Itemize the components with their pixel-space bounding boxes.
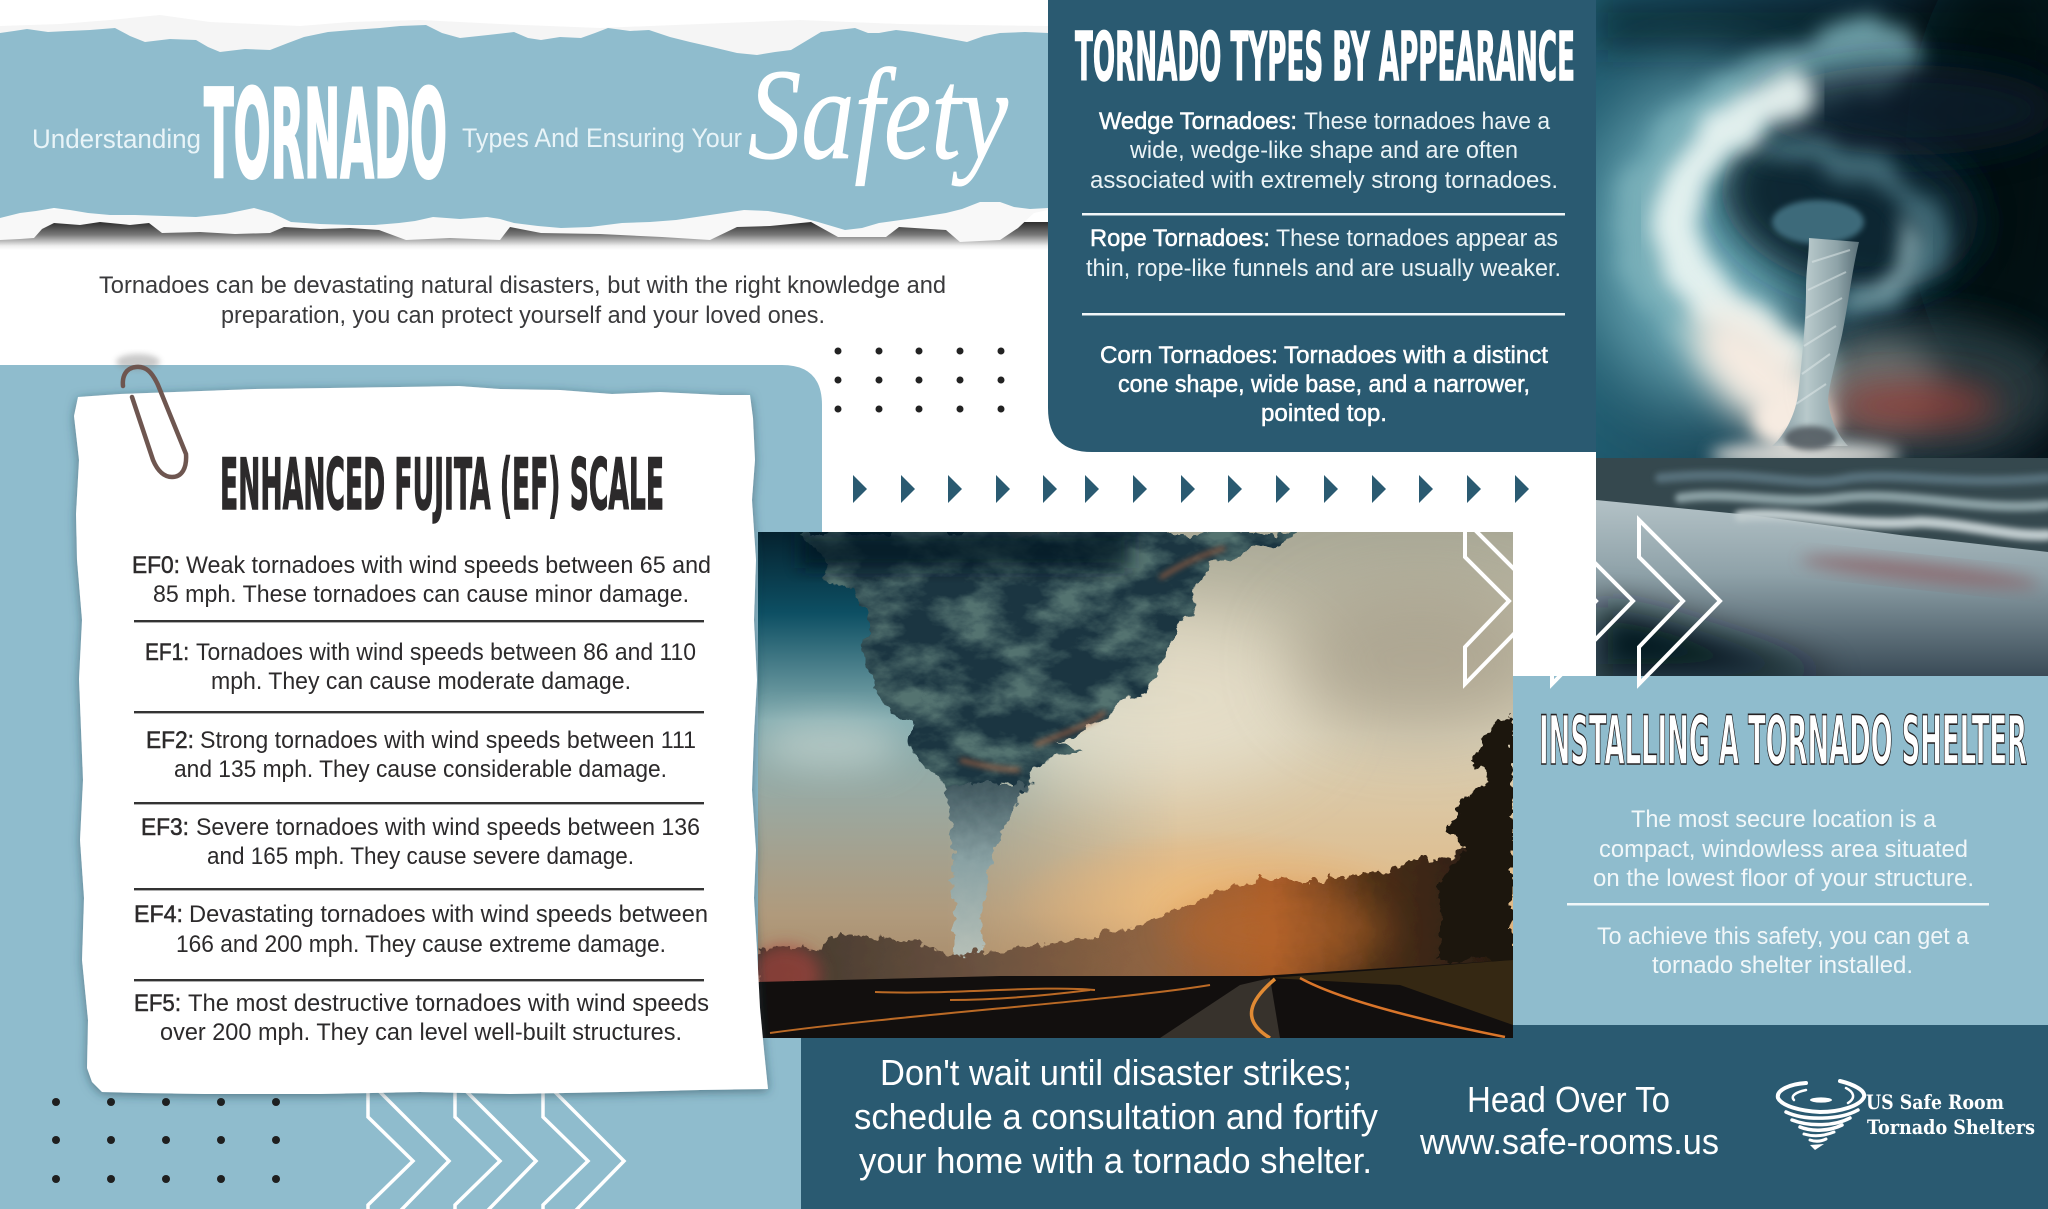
list: EF0: EF0: (132, 552, 180, 579)
corn tornadoes: cone shape, wide base, and a narrower, (1118, 371, 1530, 398)
arrow row (853, 475, 1529, 503)
panel: left blue background (0, 365, 822, 1209)
shelter text: To achieve this safety, you can get a (1597, 923, 1970, 950)
photo: tornado on highway at sunset (749, 532, 1550, 1038)
rope tornadoes (1086, 225, 1561, 282)
photo: waterspout tornado over sea (1585, 0, 2048, 676)
list: EF5: over 200 mph. They can level well-built structures. (160, 1019, 682, 1046)
list: EF1 (145, 639, 696, 695)
large tree at right (1440, 715, 1513, 960)
shelter text: on the lowest floor of your structure. (1593, 865, 1974, 892)
chevrons: bottom group (368, 1080, 624, 1209)
wedge tornadoes: These tornadoes have a (1304, 108, 1551, 135)
list: EF4 (134, 901, 708, 958)
call to action: your home with a tornado shelter. (859, 1140, 1372, 1181)
list: EF1: EF1: (145, 639, 189, 666)
call to action: schedule a consultation and fortify (854, 1096, 1378, 1137)
shelter text: compact, windowless area situated (1599, 836, 1968, 863)
list: EF5: The most destructive tornadoes with wind speeds (188, 990, 709, 1017)
shelter text: The most secure location is a (1631, 806, 1937, 833)
call to action: Don't wait until disaster strikes; (880, 1052, 1352, 1093)
dots: bottom left (52, 1098, 280, 1183)
list: EF1: mph. They can cause moderate damage. (211, 668, 631, 695)
storm cloud (758, 532, 1300, 790)
logo: US Safe Room Tornado Shelters (1778, 1081, 2035, 1150)
list: EF0: 85 mph. These tornadoes can cause minor damage. (153, 581, 689, 608)
list: EF4: EF4: (134, 901, 183, 928)
website link text (1419, 1079, 1719, 1162)
corn tornadoes: pointed top. (1261, 400, 1387, 427)
wedge tornadoes: Wedge Tornadoes: (1099, 108, 1297, 135)
logo: US Safe Room Tornado Shelters: US Safe Room (1866, 1090, 2004, 1114)
list: EF2 (146, 727, 696, 783)
list: EF3: Severe tornadoes with wind speeds between 136 (196, 814, 700, 841)
intro text: Tornadoes can be devastating natural disasters, but with the right knowledge and (99, 272, 946, 299)
list: EF2: and 135 mph. They cause considerable damage. (174, 756, 667, 783)
panel: installing a tornado shelter (1513, 676, 2048, 1025)
list: EF5: EF5: (134, 990, 181, 1017)
list: EF3 (141, 814, 700, 870)
shelter text (1567, 806, 1989, 979)
panel: footer band (801, 1025, 2048, 1209)
list: EF4: 166 and 200 mph. They cause extreme damage. (176, 931, 666, 958)
icon: paperclip (116, 354, 186, 477)
intro text (99, 272, 946, 329)
corn tornadoes (1100, 342, 1548, 427)
call to action (854, 1052, 1378, 1181)
website link text: Head Over To (1467, 1079, 1670, 1120)
tree line (758, 847, 1496, 982)
title: understanding: Understanding (32, 124, 201, 154)
wedge tornadoes (1090, 108, 1558, 194)
list: EF0 (132, 552, 711, 608)
list: EF2: Strong tornadoes with wind speeds between 111 (200, 727, 696, 754)
chevrons: right group (1465, 520, 1720, 684)
list: EF0: Weak tornadoes with wind speeds between 65 and (186, 552, 711, 579)
panel: tornado types by appearance (1048, 0, 1596, 452)
panel: torn title banner: TORNADO (204, 64, 447, 206)
list: EF3: EF3: (141, 814, 189, 841)
title: types and ensuring your: Types And Ensuring Your (462, 123, 742, 153)
wedge tornadoes: wide, wedge-like shape and are often (1129, 137, 1518, 164)
text: ENHANCED FUJITA (EF) SCALE (220, 444, 664, 526)
list: EF2: EF2: (146, 727, 194, 754)
website link text: www.safe-rooms.us (1419, 1121, 1719, 1162)
wedge tornadoes: associated with extremely strong tornadoes. (1090, 167, 1558, 194)
panel: torn title banner (0, 15, 1048, 250)
rope tornadoes: thin, rope-like funnels and are usually weaker. (1086, 255, 1561, 282)
decorative dots top (834, 348, 1004, 412)
list: EF5 (134, 990, 709, 1046)
list: EF1: Tornadoes with wind speeds between 86 and 110 (196, 639, 696, 666)
shelter text: tornado shelter installed. (1652, 952, 1913, 979)
list: EF3: and 165 mph. They cause severe damage. (207, 843, 634, 870)
rope tornadoes: These tornadoes appear as (1276, 225, 1558, 252)
list: EF4: Devastating tornadoes with wind speeds between (189, 901, 708, 928)
icon: tornado logo (1778, 1081, 1864, 1150)
funnel (946, 784, 1028, 978)
rope tornadoes: Rope Tornadoes: (1090, 225, 1270, 252)
panel: enhanced fujita scale note paper (74, 386, 768, 1094)
corn tornadoes: Corn Tornadoes: Tornadoes with a distinct (1100, 342, 1548, 369)
intro text: preparation, you can protect yourself and your loved ones. (221, 302, 825, 329)
title: safety script: Safety (748, 43, 1008, 187)
